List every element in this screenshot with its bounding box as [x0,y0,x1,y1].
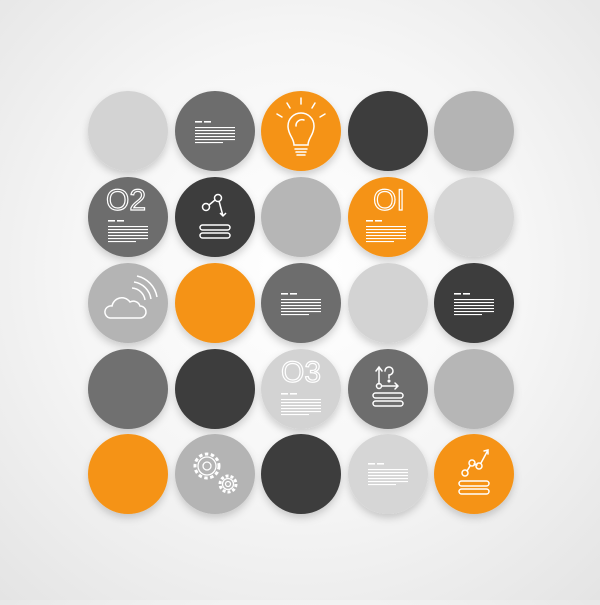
number 02: O2 [106,184,146,217]
text block r3c5 [454,293,494,315]
number 01: OI [373,184,405,217]
number 02 [106,184,148,242]
text block r1c2 [195,121,235,143]
row 4 [88,349,514,429]
number 01 [366,184,406,242]
row 5 [88,434,514,514]
grid of circles [88,91,514,514]
text block r5c4 [368,463,408,485]
icon: growth chart [459,450,489,494]
number 03 [281,356,321,415]
icon: gears [195,454,236,492]
icon: cloud [105,276,157,318]
row 3 [88,263,514,343]
number 03: O3 [281,356,321,389]
icon: connection [200,194,230,238]
text block r3c3 [281,293,321,315]
row 1 [88,91,514,171]
icon: question axis [373,367,403,406]
icon: light bulb [277,98,325,155]
row 2 [88,177,514,257]
